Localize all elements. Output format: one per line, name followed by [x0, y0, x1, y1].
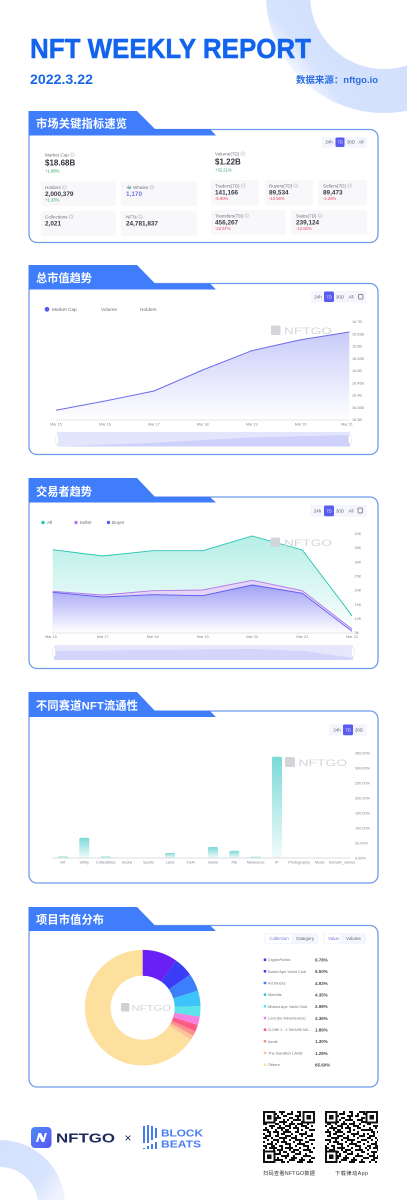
line chart: market cap: 16.35B [352, 406, 365, 410]
card: buyers: 89,534 [269, 190, 289, 196]
area chart: traders: Mar 19 [197, 635, 209, 639]
legend: Seller [80, 520, 92, 526]
legend list: 9.78% [315, 958, 328, 962]
area chart: traders: Mar 21 [296, 635, 308, 639]
bar chart: liquidity: IP [275, 860, 279, 864]
watermark: NFTGO [284, 326, 332, 337]
panel: market key metrics [28, 111, 378, 242]
card: traders: Traders(7D) ◎ [215, 182, 246, 190]
bar chart: liquidity: 250.00% [355, 782, 371, 786]
legend [41, 520, 125, 526]
card: holders [41, 181, 116, 206]
logo: NFTGO: NFTGO [56, 1132, 115, 1146]
line chart: market cap: Mar 21 [341, 422, 353, 426]
legend list: 1.28% [315, 1051, 328, 1056]
line chart: market cap: 16.6B [352, 345, 362, 349]
data source: 数据来源：nftgo.io [296, 74, 379, 85]
toggle buttons: Collection [269, 936, 289, 941]
bar chart: liquidity: Utility [80, 860, 89, 864]
time range buttons: 24h [314, 294, 322, 300]
legend list: 4.93% [315, 981, 328, 986]
card: sales [291, 210, 367, 235]
legend list: Azuki [268, 1039, 278, 1044]
heading: market key metrics: 市场关键指标速览 [36, 116, 127, 130]
heading: collection market cap distribution: 项目市值分布 [36, 912, 104, 926]
logo: BlockBeats: BLOCK [161, 1128, 203, 1140]
area chart: traders: Mar 20 [246, 635, 258, 639]
metric: market cap: $18.68B [45, 158, 75, 168]
area chart: traders: 20K [354, 588, 362, 592]
card: sellers: Sellers(7D) ◎ [323, 182, 352, 190]
legend: Buyer [112, 520, 125, 526]
area chart: traders: 40K [354, 532, 362, 536]
area chart: traders: Mar 22 [346, 635, 358, 639]
bar chart: liquidity: Photography [288, 860, 310, 864]
watermark [121, 1003, 172, 1013]
bar chart: liquidity: Domain_names [329, 860, 355, 864]
line chart: market cap: Mar 15 [50, 422, 62, 426]
card: traders: 141,166 [215, 190, 239, 196]
legend: All [47, 520, 52, 526]
time range buttons [322, 137, 367, 148]
legend list: Loot (for Adventurers) [268, 1016, 306, 1020]
legend: Market Cap [52, 307, 77, 313]
time range buttons: 7D [345, 727, 351, 732]
legend list: CryptoPunks [268, 957, 290, 962]
time range buttons: All [349, 508, 353, 513]
line chart: market cap: 16.7B [352, 320, 362, 324]
time range buttons: All [349, 294, 353, 300]
card: holders: 2,000,379 [45, 191, 74, 198]
area chart: traders: 5K [354, 631, 360, 635]
time range buttons: 30D [336, 508, 344, 513]
area chart: traders: 30K [354, 560, 362, 564]
metric: volume [215, 150, 246, 172]
card: sales: -12.82% [296, 226, 312, 231]
line chart: market cap: 16.55B [352, 357, 365, 361]
card: transfers [211, 210, 286, 235]
time range buttons: All [359, 140, 363, 145]
card: nfts: NFTs ◎ [126, 214, 143, 220]
metric: volume: $1.22B [215, 158, 241, 166]
legend list [264, 957, 330, 1068]
card: whales [121, 181, 197, 206]
heading: market cap trend: 总市值趋势 [36, 271, 92, 285]
metric: volume: Volume(7D) ◎ [215, 150, 246, 158]
line chart: market cap: 16.45B [352, 381, 365, 385]
legend list: Bored Ape Yacht Club [268, 969, 306, 974]
line chart: market cap: Mar 19 [246, 422, 258, 426]
line chart: market cap: 16.3B [352, 418, 362, 422]
time range buttons: 24h [314, 508, 322, 513]
bar chart: liquidity: Music [315, 860, 325, 864]
card: sellers: -2.26% [323, 196, 337, 201]
time range buttons: 30D [336, 294, 344, 300]
legend list: 5.50% [315, 969, 328, 974]
area chart: traders: 35K [354, 546, 362, 550]
line chart: market cap: Mar 16 [99, 422, 111, 426]
time range buttons: 7D [326, 508, 332, 513]
card: holders: Holders ◎ [45, 184, 67, 191]
area chart: traders [45, 532, 362, 639]
bar chart: liquidity: 300.00% [355, 766, 371, 770]
panel: NFT liquidity by sector [28, 692, 378, 883]
legend list: The Sandbox LAND [268, 1050, 303, 1056]
card: buyers: Buyers(7D) ◎ [269, 182, 299, 190]
time range buttons: 24h [333, 727, 341, 732]
range slider [56, 432, 352, 446]
watermark [270, 538, 332, 549]
QR code: NFTGO data [263, 1111, 315, 1163]
caption: app QR: 下载律动App [335, 1169, 368, 1177]
card: sales: 239,124 [296, 220, 320, 226]
card: collections: Collections ◎ [45, 214, 74, 220]
legend list: CLONE X - X TAKASHI MU... [268, 1027, 311, 1032]
metric: market cap: +1.88% [45, 168, 60, 174]
legend list: Mutant Ape Yacht Club [268, 1004, 307, 1009]
logo: NFTGO [31, 1127, 115, 1148]
bar chart: liquidity: Game [208, 860, 218, 864]
line chart: market cap: 16.4B [352, 394, 362, 398]
card: whales: 1,170 [126, 191, 142, 198]
bar chart: liquidity: 100.00% [355, 826, 371, 830]
time range buttons [329, 724, 367, 736]
panel: trader trend [28, 478, 378, 668]
line chart: market cap: Mar 20 [295, 422, 307, 426]
toggle buttons: Volume [346, 936, 361, 941]
card: traders [211, 180, 259, 205]
bar chart: liquidity: 200.00% [355, 796, 371, 800]
card: traders: -5.90% [215, 196, 229, 201]
card: collections: 2,021 [45, 220, 61, 228]
card: transfers: 456,267 [215, 220, 239, 226]
panel: collection market cap distribution [28, 907, 378, 1087]
line chart: market cap [50, 320, 365, 426]
metric: market cap: Market Cap ◎ [45, 152, 75, 158]
time range buttons: 7D [326, 294, 332, 300]
time range buttons: 30D [347, 140, 355, 145]
toggle buttons [264, 933, 366, 944]
area chart: traders: Mar 18 [147, 635, 159, 639]
legend list: 65.60% [315, 1062, 330, 1068]
bar chart: liquidity: Sports [143, 860, 154, 864]
watermark [271, 326, 332, 337]
bar chart: liquidity: Pfp [231, 860, 237, 864]
legend list: Art Blocks [268, 980, 286, 986]
bar chart: liquidity: 50.00% [355, 842, 369, 846]
line chart: market cap: Mar 17 [148, 422, 160, 426]
card: nfts [121, 211, 197, 236]
cross sign: × [124, 1131, 132, 1145]
bar chart: liquidity: Social [122, 860, 132, 864]
card: transfers: Transfers(7D) ◎ [215, 212, 249, 220]
time range buttons: 24h [325, 140, 333, 145]
legend list: 2.36% [315, 1016, 328, 1021]
QR code: app download [325, 1111, 378, 1163]
card: buyers: -10.56% [269, 196, 285, 201]
decorative ring bottom left [0, 1140, 65, 1200]
donut chart [98, 963, 188, 1053]
time range buttons [311, 291, 366, 302]
heading: trader trend: 交易者趋势 [36, 484, 92, 498]
legend list: 2.98% [315, 1004, 328, 1009]
legend list: 4.35% [315, 992, 328, 998]
bar chart: liquidity [52, 752, 371, 864]
legend: Volume [101, 307, 117, 313]
watermark: NFTGO [132, 1003, 172, 1013]
title: NFT WEEKLY REPORT [30, 33, 311, 64]
area chart: traders: 25K [354, 574, 362, 578]
time range buttons [310, 505, 367, 517]
legend: Holders [140, 307, 157, 313]
watermark [285, 757, 347, 769]
bar chart: liquidity: Art [60, 860, 66, 864]
metric: volume: +32.21% [215, 168, 232, 172]
panel: market cap trend [28, 265, 378, 454]
bar chart: liquidity: 150.00% [355, 812, 371, 816]
legend list: Others [268, 1062, 280, 1067]
area chart: traders: Mar 16 [45, 635, 57, 639]
bar chart: liquidity: 0.00% [355, 856, 366, 860]
bar chart: liquidity: 350.00% [355, 752, 371, 756]
legend [45, 307, 157, 313]
card: transfers: -22.67% [215, 226, 231, 231]
area chart: traders: Mar 17 [97, 635, 109, 639]
card: sales: Sales(7D) ◎ [296, 212, 323, 220]
card: nfts: 24,781,837 [126, 220, 158, 228]
legend list: 1.89% [315, 1028, 328, 1032]
range slider [52, 645, 354, 660]
decorative ring top right [266, 0, 407, 113]
date: 2022.3.22 [30, 71, 93, 87]
legend list: 1.30% [315, 1039, 328, 1044]
bar chart: liquidity: Metaverse [247, 860, 265, 864]
watermark: NFTGO [284, 538, 332, 549]
line chart: market cap: Mar 18 [197, 422, 209, 426]
card: holders: +1.33% [45, 198, 60, 202]
card: sellers [318, 180, 367, 205]
watermark: NFTGO [298, 758, 347, 769]
logo: BlockBeats [144, 1125, 203, 1150]
card: sellers: 89,473 [323, 190, 343, 196]
line chart: market cap: 16.5B [352, 369, 362, 373]
heading: NFT liquidity by sector: 不同赛道NFT流通性 [36, 698, 138, 712]
bar chart: liquidity: Land [166, 860, 174, 864]
metric: market cap [45, 152, 75, 174]
time range buttons: 30D [355, 727, 363, 732]
card: collections [41, 211, 116, 236]
caption: NFTGO data QR: 扫码查看NFTGO数据 [263, 1169, 315, 1177]
time range buttons: 7D [337, 140, 343, 145]
toggle buttons: Category [296, 936, 315, 941]
logo: BlockBeats: BEATS [161, 1138, 201, 1150]
card: buyers [265, 180, 313, 205]
toggle buttons: Value [328, 936, 340, 941]
bar chart: liquidity: Collectibles [96, 860, 116, 864]
area chart: traders: 15K [354, 603, 362, 607]
legend list: Meebits [268, 992, 282, 997]
area chart: traders: 10K [354, 617, 362, 621]
line chart: market cap: 16.65B [352, 332, 365, 336]
card: whales: 🐳 Whales ◎ [126, 184, 155, 191]
bar chart: liquidity: DeFi [187, 860, 195, 864]
